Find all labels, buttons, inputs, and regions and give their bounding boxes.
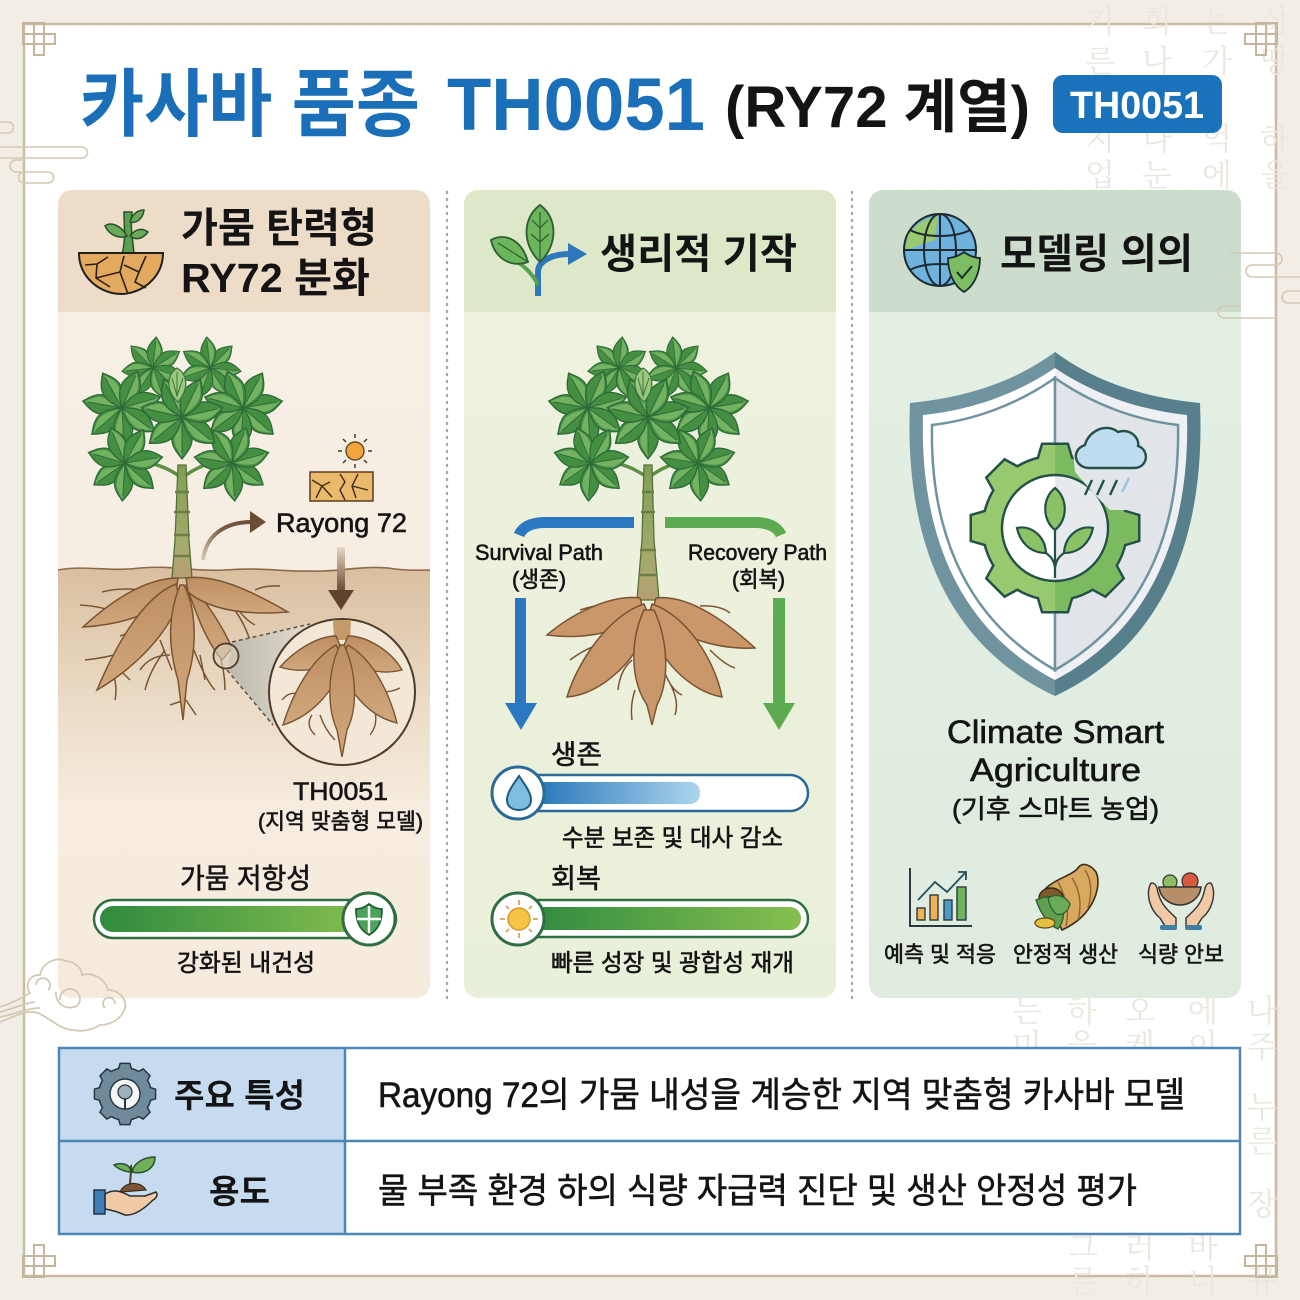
label: recovery path: Recovery Path xyxy=(688,540,827,565)
bar: drought resistance xyxy=(94,893,396,945)
heading: mechanism: 생리적 기작 xyxy=(600,231,797,277)
panel 2 header band xyxy=(464,190,836,312)
label: climate smart agriculture xyxy=(947,714,1164,824)
label: climate smart agriculture: (기후 스마트 농업) xyxy=(952,794,1159,824)
watermark hangul bottom right: 나 xyxy=(1247,994,1277,1029)
watermark hangul top right: 억 xyxy=(1202,122,1232,157)
text: key characteristics value: Rayong 72의 가뭄 내성을 계승한 지역 맞춤형 카사바 모델 xyxy=(378,1076,1185,1115)
icon: growth chart xyxy=(910,868,972,926)
shield emblem xyxy=(909,352,1201,696)
info table xyxy=(58,1047,1241,1235)
watermark hangul bottom right: 누 xyxy=(1247,1090,1277,1125)
watermark hangul bottom right: 미 xyxy=(1012,1028,1042,1063)
label: TH0051: TH0051 xyxy=(293,778,388,806)
panel 3 header band xyxy=(869,190,1241,312)
icon: sprout in gear xyxy=(1017,488,1093,578)
ground soil xyxy=(58,567,430,800)
watermark hangul bottom right: 러 xyxy=(1125,1230,1155,1265)
label: stable production: 안정적 생산 xyxy=(1013,942,1118,967)
corner knot bottom left xyxy=(23,1245,55,1277)
cassava roots xyxy=(80,577,288,720)
icon: rain cloud xyxy=(1076,428,1146,495)
watermark hangul top right: 하 xyxy=(1260,122,1290,157)
watermark hangul top right: 나 xyxy=(1142,122,1172,157)
watermark hangul bottom right: 하 xyxy=(1125,1264,1155,1299)
icon: gear xyxy=(95,1064,155,1124)
watermark hangul top right: 눈 xyxy=(1142,158,1172,193)
magnified root circle xyxy=(269,619,415,765)
label: survival: 생존 xyxy=(551,740,602,770)
watermark hangul top right: 회 xyxy=(1142,4,1172,39)
icon: green shield xyxy=(356,904,382,935)
watermark hangul top right: 기 xyxy=(1085,4,1115,39)
title: TH0051 xyxy=(447,63,705,146)
icon: sun xyxy=(500,900,538,938)
label: recovery: 회복 xyxy=(551,864,601,894)
icon: water drop xyxy=(507,776,531,810)
panel: physiological mechanism xyxy=(464,190,836,998)
watermark hangul bottom right: 을 xyxy=(1067,1028,1097,1063)
watermark hangul top right: 을 xyxy=(1260,158,1290,193)
watermark hangul top right xyxy=(1085,4,1290,193)
heading: significance: 모델링 의의 xyxy=(1000,231,1193,277)
trunk xyxy=(637,465,659,600)
icon: sprout in cracked soil xyxy=(79,210,163,294)
icon: hand holding sprout xyxy=(94,1157,157,1215)
watermark hangul bottom right: 주 xyxy=(1247,1030,1277,1065)
label: water retention: 수분 보존 및 대사 감소 xyxy=(562,825,783,852)
watermark hangul top right: 는 xyxy=(1202,4,1232,39)
label: rapid growth: 빠른 성장 및 광합성 재개 xyxy=(551,950,794,977)
watermark hangul bottom right: 는 xyxy=(1012,994,1042,1029)
arrow: recovery path xyxy=(665,522,795,730)
watermark hangul bottom right: 뀨 xyxy=(1247,1264,1277,1299)
label: recovery path xyxy=(688,540,827,592)
watermark hangul bottom right: 바 xyxy=(1188,1230,1218,1265)
heading: drought resilient: RY72 분화 xyxy=(181,255,370,301)
corner knot bottom right xyxy=(1245,1245,1277,1277)
watermark hangul bottom right: 른 xyxy=(1247,1124,1277,1159)
corner knot top right xyxy=(1245,23,1277,55)
icon: cracked soil block xyxy=(310,472,373,501)
label: climate smart agriculture: Climate Smart xyxy=(947,714,1164,750)
arrow: survival path xyxy=(505,522,634,730)
label: recovery path: (회복) xyxy=(732,567,785,592)
icon: gear xyxy=(972,440,1148,611)
watermark hangul top right: 나 xyxy=(1142,44,1172,79)
zoom wedge xyxy=(214,624,310,725)
divider xyxy=(446,192,448,1000)
label: climate smart agriculture: Agriculture xyxy=(970,752,1141,788)
row value cells xyxy=(345,1047,1241,1235)
cassava tubers xyxy=(547,598,755,725)
icon: globe with shield xyxy=(904,214,980,292)
title xyxy=(80,63,1030,146)
watermark hangul bottom right: 장 xyxy=(1247,1187,1277,1222)
label: TH0051 xyxy=(258,778,423,834)
heading: drought resilient xyxy=(181,205,377,301)
watermark hangul top right: 업 xyxy=(1085,158,1115,193)
title: 카사바 품종 xyxy=(80,63,420,146)
label: survival path xyxy=(475,540,603,592)
panel: drought resilience xyxy=(58,190,430,998)
bar: survival xyxy=(492,767,808,819)
label: Rayong 72: Rayong 72 xyxy=(276,508,407,538)
watermark hangul bottom right xyxy=(1012,994,1277,1299)
label: survival path: (생존) xyxy=(512,567,566,592)
watermark hangul bottom right: 에 xyxy=(1188,994,1218,1029)
watermark hangul bottom right: 케 xyxy=(1125,1028,1155,1063)
icon: leaves and branching arrow xyxy=(491,205,587,296)
watermark hangul top right: 가 xyxy=(1202,44,1232,79)
watermark hangul bottom right: 니 xyxy=(1188,1264,1218,1299)
badge TH0051 xyxy=(1053,75,1222,133)
badge TH0051: TH0051 xyxy=(1070,85,1204,127)
watermark hangul top right: 삶 xyxy=(1260,4,1290,39)
bar: recovery xyxy=(492,893,808,945)
text: usage value: 물 부족 환경 하의 식량 자급력 진단 및 생산 안정성 평가 xyxy=(378,1172,1137,1211)
label: survival path: Survival Path xyxy=(475,540,603,565)
watermark hangul bottom right: 그 xyxy=(1068,1230,1098,1265)
watermark hangul bottom right: 오 xyxy=(1125,994,1155,1029)
title: (RY72 계열) xyxy=(725,75,1030,140)
panel 1 header band xyxy=(58,190,430,312)
trunk xyxy=(172,465,192,578)
cloud ornament left xyxy=(0,122,88,183)
watermark hangul top right: 지 xyxy=(1085,122,1115,157)
arrow: curved to Rayong 72 xyxy=(203,511,266,560)
corner knot top left xyxy=(23,23,55,55)
arrow: down to TH0051 xyxy=(328,547,354,610)
label: TH0051: (지역 맞춤형 모델) xyxy=(258,809,423,834)
label: prediction: 예측 및 적응 xyxy=(884,942,996,967)
icon: sun xyxy=(338,434,372,468)
icon: hands with food bowl xyxy=(1148,873,1214,930)
panel: modeling significance xyxy=(869,190,1241,998)
label: usage: 용도 xyxy=(209,1173,270,1210)
watermark hangul top right: 에 xyxy=(1202,158,1232,193)
row header cells xyxy=(58,1047,345,1235)
watermark hangul top right: 땅 xyxy=(1260,44,1290,79)
label: enhanced durability: 강화된 내건성 xyxy=(177,950,315,977)
label: food security: 식량 안보 xyxy=(1138,942,1224,967)
label: drought resistance: 가뭄 저항성 xyxy=(180,863,311,894)
cloud ornament bottom left xyxy=(0,959,125,1031)
watermark hangul bottom right: 이 xyxy=(1188,1028,1218,1063)
label: key characteristics: 주요 특성 xyxy=(174,1077,305,1114)
cassava plant canopy xyxy=(537,323,755,517)
icon: cornucopia xyxy=(1035,865,1098,930)
cassava plant canopy xyxy=(71,323,289,517)
cloud ornament right xyxy=(1218,253,1300,318)
table grid xyxy=(59,1048,1240,1234)
watermark hangul bottom right: 하 xyxy=(1067,994,1097,1029)
watermark hangul bottom right: 른 xyxy=(1068,1264,1098,1299)
watermark hangul top right: 른 xyxy=(1085,44,1115,79)
heading: drought resilient: 가뭄 탄력형 xyxy=(181,205,377,251)
